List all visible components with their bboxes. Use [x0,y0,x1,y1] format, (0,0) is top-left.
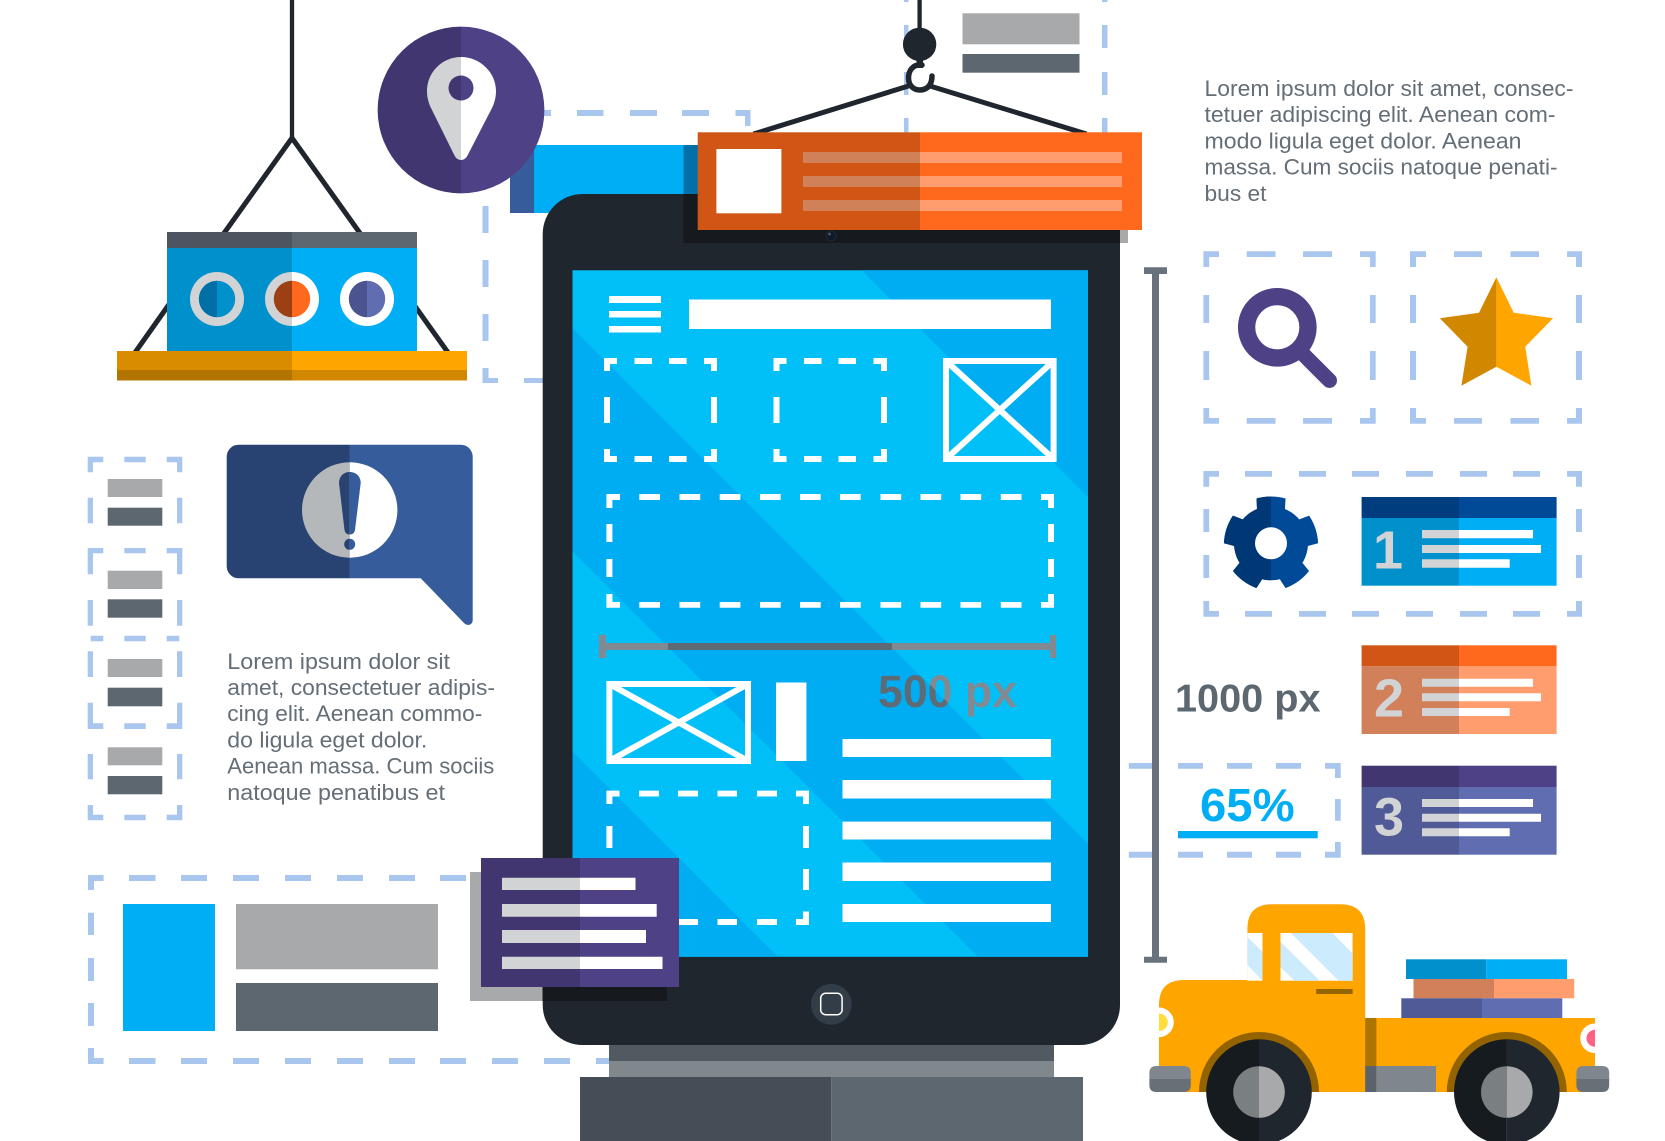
placeholder bars at top [962,13,1080,73]
numbered card 3: 3 [1374,788,1404,848]
text block: left paragraph: do ligula eget dolor. [227,728,427,752]
front bumper [1149,1066,1191,1092]
dashed placeholder 2 [774,358,887,462]
cargo stack [1401,959,1574,1018]
text block: right paragraph: modo ligula eget dolor. Aenean [1204,128,1522,153]
crane hook and cables [754,0,1086,134]
delivery truck [1144,904,1610,1141]
numbered card 3 [1362,766,1557,855]
blue bar behind tablet [510,145,698,213]
rear side window [1247,933,1262,981]
placeholder pair 3 [108,659,162,706]
label: 1000 px: 1000 px [1175,678,1321,721]
dashed frame: behind map pin and blue bar [482,110,750,383]
text block: right paragraph: tetuer adipiscing elit. Aenean com- [1204,102,1556,127]
rear bumper [1576,1066,1609,1092]
dashed placeholder lower [606,791,809,925]
side step [1365,1066,1436,1092]
numbered card 1 [1362,497,1557,586]
icon: map pin badge [378,27,544,193]
icon: image placeholder square [946,361,1054,459]
image placeholder square [716,149,781,213]
text lines on screen [842,739,1051,922]
placeholder pair 1 [108,479,162,526]
header bar [689,300,1051,329]
text block: right paragraph: Lorem ipsum dolor sit amet, consec- [1204,76,1574,101]
front wheel [1199,1032,1319,1141]
icon: magnifier [1247,297,1330,380]
wide dashed placeholder [606,494,1054,608]
rear wheel [1447,1032,1567,1141]
panel: left column of dashed placeholders [88,457,182,820]
door handle [1316,989,1353,994]
numbered card 1: 1 [1373,520,1403,580]
tail light [1580,1024,1595,1054]
cab divider [1365,1018,1376,1066]
width ruler [599,635,1056,658]
icon: wide image placeholder [609,684,748,761]
middle porthole [265,272,319,326]
placeholder pair 2 [108,571,162,618]
placeholder pair 4 [108,747,162,794]
label: 65%: 65% [1200,779,1295,831]
stat underline [1178,831,1318,838]
label: 500 px: 500 px [878,666,1017,717]
panel: star icon box [1410,251,1582,424]
crane load: blue container on a platform [117,0,467,380]
home button [811,984,852,1025]
text block: left paragraph: cing elit. Aenean commo- [227,701,482,726]
height ruler [1144,267,1167,963]
dashed frame: top crane placeholder [904,0,1108,134]
orange card shadow [684,194,1128,243]
tablet device [543,194,1120,1045]
headlight [1159,1008,1174,1038]
purple card shadow [470,872,667,1001]
text block: left paragraph: Aenean massa. Cum sociis [227,754,494,779]
panel: gear and card 1 box [1203,471,1582,617]
text block: right paragraph: bus et [1204,181,1266,206]
card text lines [803,152,1122,211]
tablet stand [580,1045,1083,1141]
numbered card 2 [1362,645,1557,734]
panel: bottom left dashed layout block [88,875,609,1064]
text block: right paragraph: massa. Cum sociis natoque penati- [1204,155,1558,180]
panel: 65% stat box [1129,763,1341,858]
truck body [1159,904,1595,1092]
front window [1280,933,1353,981]
purple text card [481,858,679,987]
icon: speech bubble with exclamation [227,445,473,625]
dashed placeholder 1 [604,358,717,462]
icon: menu lines [609,296,661,332]
right porthole [340,272,394,326]
numbered card 2: 2 [1374,669,1404,729]
orange header card [698,132,1142,230]
text block: left paragraph: amet, consectetuer adipis- [227,675,495,700]
left porthole [190,272,244,326]
icon: star [1440,277,1553,386]
text block: left paragraph: natoque penatibus et [227,780,445,805]
text block: left paragraph: Lorem ipsum dolor sit [227,649,450,674]
tablet camera [826,231,836,241]
icon: gear [1222,496,1320,590]
panel: search icon box [1203,251,1376,424]
white column block [776,682,806,761]
tablet screen [572,270,1088,957]
